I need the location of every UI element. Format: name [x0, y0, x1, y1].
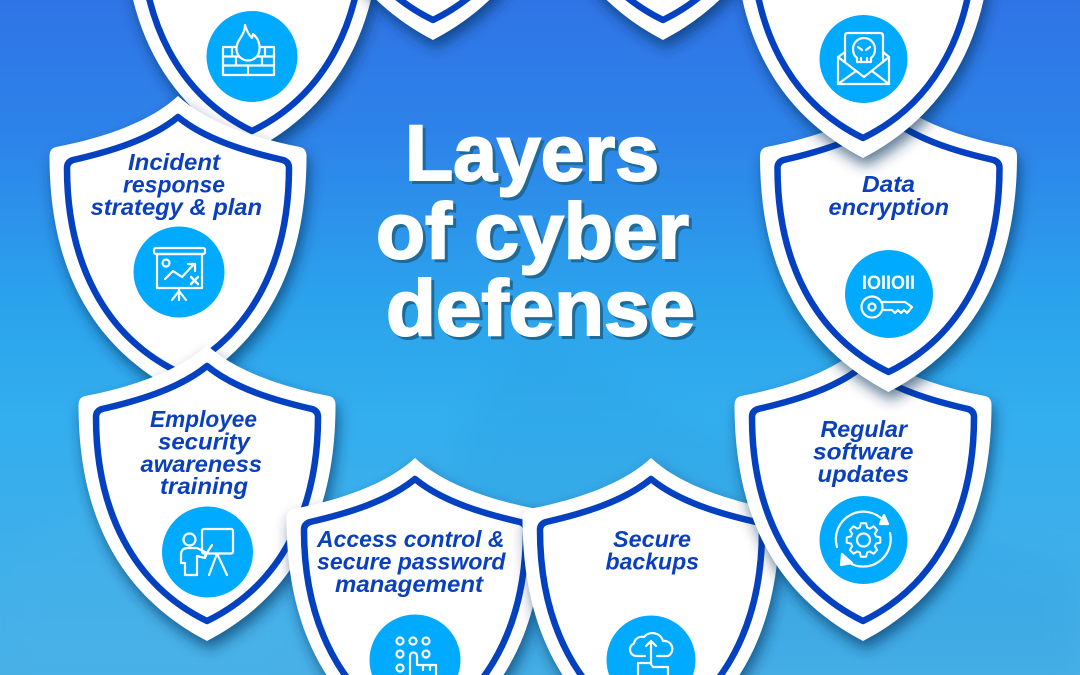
icon: presentation board	[134, 226, 224, 318]
shield: employee training	[78, 345, 338, 649]
label: regular software updates: Regular	[820, 416, 908, 442]
label: employee security awareness training: training	[160, 473, 248, 499]
label: regular software updates: software	[813, 438, 914, 464]
title: Layers	[405, 108, 659, 197]
label: regular software updates	[813, 416, 914, 487]
icon: cloud backup	[606, 616, 696, 675]
title: defense	[386, 263, 695, 352]
label: employee security awareness training: security	[158, 428, 251, 454]
shield: data encryption	[760, 96, 1020, 400]
shield: firewall	[124, 0, 384, 159]
shield: top right cropped	[534, 0, 794, 48]
title: of cyber	[376, 186, 689, 275]
shield: phishing email	[734, 0, 994, 166]
label: incident response strategy and plan	[90, 149, 262, 220]
label: incident response strategy and plan: Incident	[128, 149, 221, 175]
label: employee security awareness training	[140, 406, 262, 499]
icon: binary key: IOIIOII	[862, 273, 915, 294]
label: regular software updates: updates	[818, 461, 909, 487]
label: data encryption: encryption	[828, 194, 949, 220]
shield: access control	[286, 458, 546, 675]
label: secure backups: backups	[606, 548, 699, 574]
shield: top left cropped	[304, 0, 564, 48]
shield: secure backups	[522, 458, 782, 675]
label: access control and secure password management: secure password	[317, 548, 506, 574]
icon: firewall	[206, 11, 298, 102]
icon: gear with refresh arrows	[820, 496, 908, 584]
icon: keypad and finger	[370, 614, 460, 675]
label: incident response strategy and plan: response	[123, 172, 225, 198]
icon: skull in envelope	[820, 15, 908, 103]
label: secure backups: Secure	[613, 526, 691, 552]
label: incident response strategy and plan: strategy & plan	[90, 194, 262, 220]
label: secure backups	[606, 526, 699, 574]
label: access control and secure password management: Access control &	[316, 526, 504, 552]
label: employee security awareness training: awareness	[140, 451, 262, 477]
shield: incident response	[50, 96, 310, 400]
label: employee security awareness training: Employee	[150, 406, 257, 432]
label: data encryption: Data	[862, 171, 915, 197]
title	[376, 108, 695, 352]
label: access control and secure password management: management	[335, 571, 484, 597]
label: access control and secure password management	[316, 526, 506, 597]
icon: binary key	[845, 250, 933, 338]
icon: trainer at board	[162, 506, 253, 598]
label: data encryption	[828, 171, 949, 220]
shield: software updates	[734, 345, 994, 649]
